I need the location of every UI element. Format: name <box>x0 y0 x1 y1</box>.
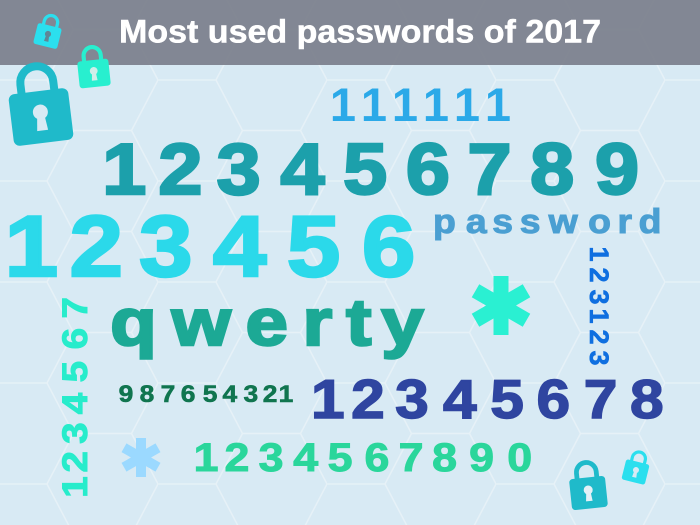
password: 123456789: 123456789 <box>102 129 639 210</box>
icon: mint lock top <box>76 45 111 89</box>
icon: cyan lock bottom <box>621 449 652 485</box>
password: 123123 vertical: 123123 <box>584 246 614 366</box>
password: 1234567 vertical: 1234567 <box>56 297 95 498</box>
password: 12345678: 12345678 <box>311 369 664 430</box>
password: password: password <box>433 203 662 241</box>
password: 123456: 123456 <box>5 199 415 295</box>
header band <box>0 0 700 65</box>
password: qwerty: qwerty <box>110 287 424 360</box>
icon: large teal lock <box>5 63 74 146</box>
icon: teal lock bottom <box>567 461 608 510</box>
title: Most used passwords of 2017 <box>119 14 601 50</box>
icon: small asterisk <box>124 438 158 477</box>
password: 987654321: 987654321 <box>119 381 293 408</box>
icon: small cyan lock top <box>33 13 64 49</box>
icon: large asterisk <box>476 276 526 335</box>
password: 111111: 111111 <box>330 78 511 131</box>
password: 1234567890: 1234567890 <box>194 435 532 479</box>
